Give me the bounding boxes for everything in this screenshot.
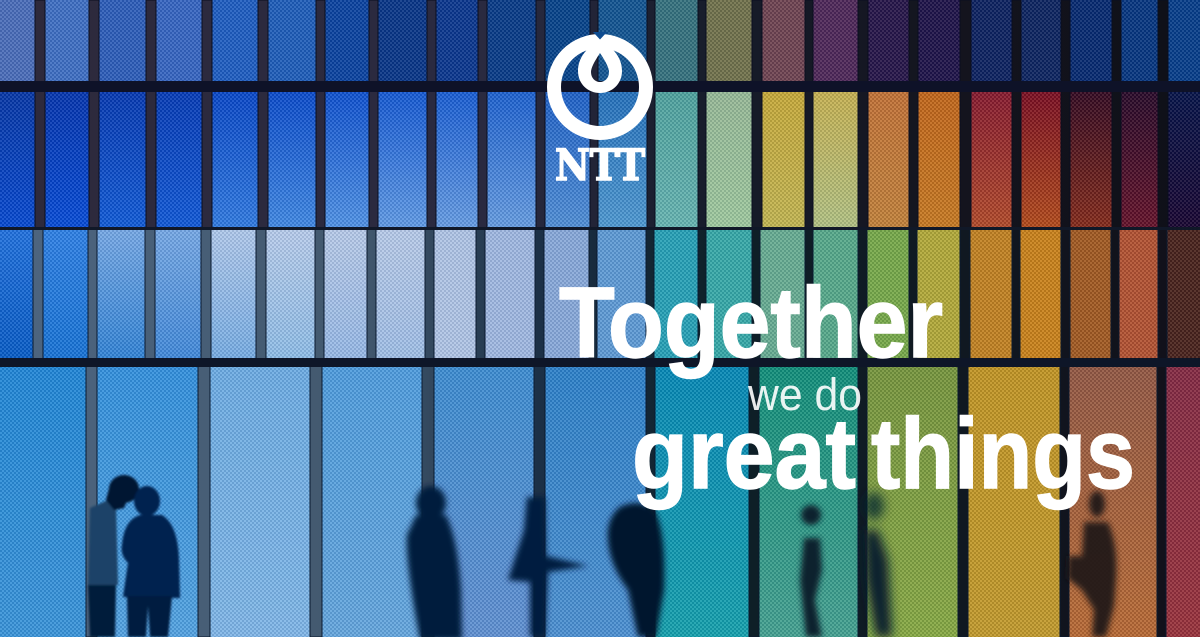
logo top notch <box>593 32 607 40</box>
bottom row mullions <box>86 360 1166 637</box>
silhouette: person in coat <box>608 503 664 637</box>
logo wordmark: NTT <box>555 141 645 191</box>
silhouette: couple <box>88 475 180 637</box>
logo ring <box>554 41 646 133</box>
lower row of glass panels <box>0 230 1200 360</box>
silhouette: blurred pair of people on green panels <box>800 492 892 637</box>
headline <box>559 267 1135 510</box>
headline: things: things <box>871 398 1135 510</box>
headline: great: great <box>632 398 856 510</box>
top row of glass panels <box>0 0 1200 86</box>
silhouette: blurred person, left <box>407 486 462 637</box>
silhouette: woman walking with a bag <box>1067 491 1116 637</box>
logo teardrop loop <box>578 40 622 93</box>
NTT logo <box>554 32 646 191</box>
lower window mullions <box>33 228 1167 360</box>
headline: we do: we do <box>747 369 862 420</box>
upper window mullions <box>35 0 1168 228</box>
headline: Together: Together <box>559 267 943 379</box>
horizontal beams <box>0 81 1200 367</box>
middle row of glass panels <box>0 92 1200 228</box>
bottom row of tall glass panels <box>0 366 1200 637</box>
silhouette: walking person with outstretched arm <box>508 497 588 637</box>
